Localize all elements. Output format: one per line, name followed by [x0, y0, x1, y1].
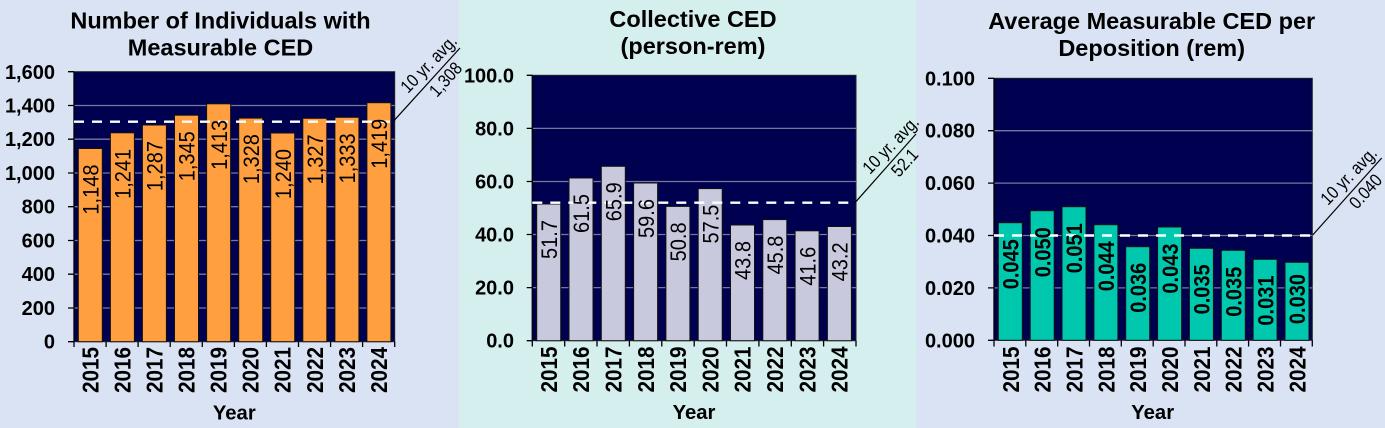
x axis year labels: 2016 [568, 346, 594, 393]
title: number of individuals: Measurable CED [128, 34, 313, 60]
ten year average callout: 1,308: 1,308 [425, 58, 466, 101]
bar value labels: 1,241 [111, 149, 136, 199]
y axis labels: 40.0 [475, 224, 514, 246]
y axis labels: 1,600 [5, 62, 55, 84]
x axis year labels: 2024 [1284, 346, 1311, 393]
bar value labels: 41.6 [795, 247, 821, 286]
y axis labels: 0.080 [925, 121, 975, 143]
x axis year labels: 2023 [794, 346, 821, 393]
bar value labels: 0.030 [1285, 274, 1310, 324]
x axis title: Year [673, 402, 716, 424]
plot area background [74, 72, 395, 342]
x axis year labels [998, 346, 1311, 393]
bar value labels: 51.7 [537, 220, 562, 259]
ten year average callout: 1,308: 10 yr. avg. [396, 31, 461, 97]
axis ticks [988, 78, 1312, 347]
x axis year labels: 2023 [1252, 346, 1279, 393]
x axis year labels: 2015 [536, 346, 562, 393]
x axis year labels: 2017 [141, 347, 168, 393]
y axis labels: 0.060 [925, 173, 975, 195]
bar value labels: 43.2 [828, 242, 853, 281]
x axis year labels: 2020 [1157, 346, 1183, 393]
x axis year labels: 2021 [730, 346, 756, 393]
y axis labels: 80.0 [475, 118, 514, 140]
y axis labels: 0.100 [925, 68, 975, 90]
x axis year labels: 2015 [998, 346, 1024, 393]
x axis year labels: 2018 [633, 346, 659, 393]
bar value labels: 0.035 [1221, 267, 1247, 317]
y axis labels: 0.000 [925, 330, 975, 352]
x axis title: Year [213, 402, 256, 424]
bar value labels: 0.044 [1094, 241, 1119, 291]
panel: collective CED [464, 6, 923, 424]
y axis labels [925, 68, 975, 352]
bar value labels: 65.9 [601, 182, 627, 221]
bar value labels: 50.8 [666, 222, 691, 261]
y axis labels: 400 [22, 264, 55, 286]
panel: number of individuals [5, 8, 466, 424]
title: number of individuals [70, 8, 371, 60]
ten year average callout: 0.040: 10 yr. avg. [1316, 143, 1381, 209]
x axis year labels: 2022 [1221, 346, 1247, 393]
title: average measurable CED: Average Measurable CED per [988, 8, 1315, 34]
bar value labels: 1,345 [175, 131, 200, 181]
ten year average dashed line [532, 201, 855, 204]
x axis year labels: 2024 [366, 346, 392, 393]
x axis year labels: 2015 [77, 347, 104, 393]
y axis labels: 0.0 [486, 331, 514, 353]
x axis year labels [536, 346, 853, 393]
bar value labels: 1,419 [367, 119, 392, 169]
x axis year labels: 2017 [1061, 346, 1088, 393]
y axis labels: 100.0 [464, 65, 514, 87]
bar value labels: 57.5 [698, 205, 724, 244]
bar value labels: 0.043 [1158, 243, 1183, 294]
y axis labels: 800 [22, 197, 55, 219]
y axis labels [464, 65, 514, 353]
x axis year labels: 2016 [1030, 346, 1056, 393]
bar value labels: 1,413 [207, 120, 232, 170]
bar value labels: 0.035 [1190, 264, 1215, 314]
bar value labels: 0.036 [1126, 263, 1151, 313]
bar value labels: 1,240 [271, 149, 296, 199]
bar value labels: 59.6 [634, 199, 659, 238]
panel: average measurable CED [925, 8, 1385, 424]
x axis year labels: 2024 [827, 346, 853, 393]
x axis year labels: 2022 [762, 346, 788, 393]
x axis year labels: 2018 [1093, 346, 1120, 393]
ten year average dashed line [994, 234, 1312, 237]
x axis year labels [77, 346, 392, 393]
x axis year labels: 2016 [109, 347, 136, 393]
panel background: left [0, 0, 459, 428]
bar value labels: 1,327 [303, 134, 328, 184]
title: average measurable CED [988, 8, 1315, 61]
plot area background [994, 78, 1312, 340]
title: collective CED: Collective CED [609, 6, 777, 32]
ten year average callout: 52.1 [855, 112, 923, 203]
plot area background [532, 75, 856, 341]
bar value labels: 43.8 [731, 241, 756, 280]
x axis year labels: 2020 [697, 346, 724, 393]
x axis year labels: 2023 [334, 347, 360, 393]
axis ticks [527, 75, 856, 347]
bar value labels: 1,148 [78, 164, 104, 215]
ten year average callout: 0.040 [1313, 143, 1385, 235]
bar value labels [537, 182, 853, 286]
bars: individuals per year [78, 103, 391, 342]
y axis labels: 1,200 [5, 129, 55, 151]
y axis labels: 20.0 [475, 278, 514, 300]
ten year average callout: 52.1: 52.1 [887, 145, 923, 181]
bar value labels: 1,328 [239, 134, 264, 184]
bar value labels [78, 119, 392, 215]
bar value labels: 0.031 [1253, 275, 1279, 326]
x axis year labels: 2019 [206, 347, 232, 393]
ten year average callout: 1,308 [393, 31, 466, 122]
x axis year labels: 2017 [600, 346, 627, 393]
x axis year labels: 2022 [302, 347, 328, 393]
bar value labels: 0.051 [1062, 223, 1087, 273]
bar value labels: 0.045 [998, 239, 1024, 289]
panel background: right [916, 0, 1385, 428]
y axis labels: 60.0 [475, 172, 514, 194]
x axis year labels: 2021 [270, 347, 296, 393]
title: collective CED: (person-rem) [621, 33, 765, 59]
y axis labels: 600 [22, 230, 55, 252]
bar value labels: 1,333 [335, 133, 360, 183]
x axis year labels: 2021 [1189, 346, 1215, 393]
y axis labels: 1,000 [5, 163, 55, 185]
y axis labels: 0.040 [925, 226, 975, 248]
ten year average dashed line [74, 120, 394, 123]
bar value labels: 61.5 [569, 194, 594, 233]
bar value labels: 1,287 [143, 141, 168, 191]
x axis year labels: 2020 [238, 347, 264, 393]
panel background: middle [458, 0, 916, 428]
title: number of individuals: Number of Individuals with [70, 8, 371, 34]
y axis labels: 1,400 [5, 96, 55, 118]
y axis labels: 200 [22, 298, 55, 320]
title: average measurable CED: Deposition (rem) [1058, 35, 1245, 61]
x axis year labels: 2019 [1125, 346, 1151, 393]
x axis year labels: 2018 [173, 347, 200, 393]
y axis labels: 0.020 [925, 278, 975, 300]
bar value labels: 45.8 [763, 236, 788, 275]
y axis labels: 0 [44, 332, 55, 354]
title: collective CED [609, 6, 777, 59]
x axis year labels: 2019 [665, 346, 691, 393]
y axis labels [5, 62, 55, 354]
bars: collective dose per year [537, 166, 851, 341]
x axis title: Year [1131, 402, 1174, 424]
bar value labels [998, 223, 1310, 326]
y axis ticks [68, 72, 395, 347]
bars: average dose per year [998, 207, 1309, 340]
bar value labels: 0.050 [1030, 227, 1056, 277]
ten year average callout: 52.1: 10 yr. avg. [858, 112, 923, 178]
